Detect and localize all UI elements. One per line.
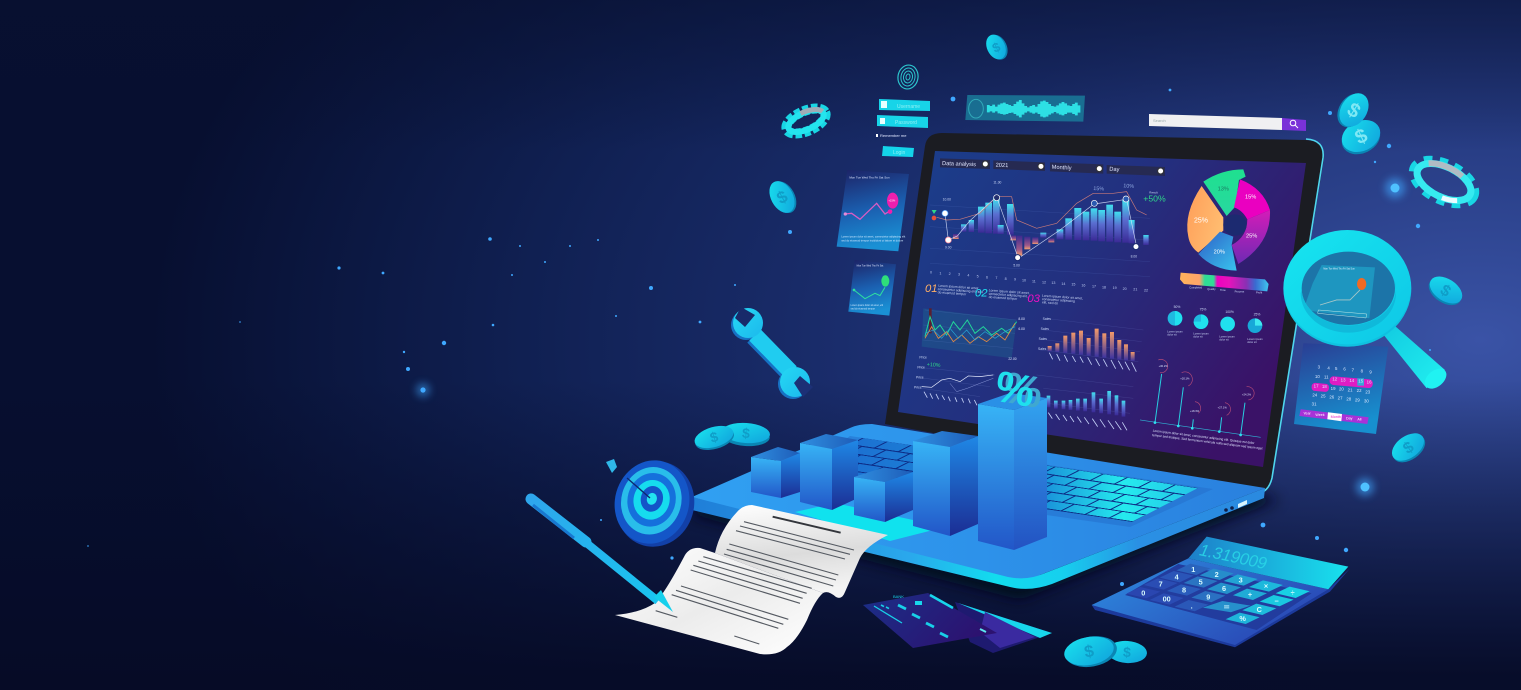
main combo chart: 11.00 — [993, 180, 1002, 184]
calendar: 13 — [1341, 377, 1346, 382]
wave area chart — [922, 308, 1025, 361]
mini chart card 2: Mon Tue Wed Thu Fri Sat — [857, 265, 884, 268]
numbered notes: 01 — [925, 283, 938, 295]
legend strip: Quality — [1207, 287, 1216, 291]
donut pie chart — [1187, 169, 1270, 271]
calendar: All — [1357, 418, 1362, 422]
orange bar chart: Sales — [1043, 317, 1051, 321]
coin: right: $ — [1437, 282, 1454, 301]
calendar: 31 — [1312, 402, 1317, 407]
wave area chart: 22.00 — [1008, 357, 1017, 361]
calculator keys: 9 — [1206, 592, 1210, 601]
donut pie chart: 25% — [1246, 234, 1257, 240]
coin pair: bottom: $ — [1123, 644, 1132, 660]
progress circles: dolor sit — [1219, 337, 1229, 341]
voice waveform panel — [965, 95, 1085, 122]
calculator keys: 3 — [1239, 576, 1243, 585]
calendar: 17 — [1314, 383, 1319, 388]
back card — [955, 602, 1052, 653]
3D bar 3 — [854, 468, 913, 522]
timeline: +18.3% — [1190, 409, 1200, 413]
calculator keys — [1125, 564, 1312, 630]
calculator readout: 1.319009 — [1198, 540, 1269, 573]
legend strip: Process — [1235, 289, 1245, 293]
timeline: +27.1% — [1218, 406, 1227, 410]
pie segment purple — [1232, 210, 1270, 264]
calendar: 29 — [1355, 397, 1360, 402]
orange bar chart: Sales — [1038, 347, 1047, 351]
numbered notes: 02 — [975, 288, 988, 300]
calculator keys: ÷ — [1291, 588, 1295, 597]
progress circles: dolor sit — [1193, 334, 1203, 338]
coin stack: top right: $ — [1352, 125, 1371, 149]
coin pair: on desk left: $ — [742, 425, 751, 441]
coin: lower right — [1387, 428, 1430, 468]
calculator — [1092, 537, 1350, 647]
lens chart card: Mon Tue Wed Thu Fri Sat Sun — [1323, 268, 1355, 271]
timeline: Lorem ipsum dolor sit amet, consectetur adipiscing elit. Quisque est dolor — [1153, 429, 1255, 445]
pie segment orange — [1187, 186, 1223, 253]
calendar: 25 — [1321, 393, 1326, 398]
progress circles: 75% — [1200, 307, 1206, 311]
timeline: tempor sed tristique. Sed fermentum vehicula nulla sed aliquam sed ipsum eget — [1152, 433, 1263, 451]
line chart: Price — [916, 376, 924, 380]
floating gear right — [1408, 153, 1480, 211]
main combo chart: 15% — [1093, 186, 1104, 193]
hour axis: 22 — [1144, 289, 1148, 293]
magnifying glass — [1283, 230, 1450, 393]
coin pair: bottom: $ — [1083, 641, 1096, 662]
hour axis: 2 — [949, 272, 951, 276]
timeline: +30.2% — [1159, 364, 1168, 368]
laptop lid — [885, 133, 1324, 494]
calendar: 18 — [1322, 384, 1327, 389]
calendar: 6 — [1343, 367, 1346, 372]
fingerprint icon — [896, 63, 920, 91]
numbered notes: elit, sed do — [1042, 300, 1058, 305]
hour axis: 16 — [1081, 284, 1085, 288]
donut pie chart: 15% — [1245, 195, 1256, 201]
timeline: +20.1% — [1180, 377, 1190, 381]
calendar: Day — [1346, 416, 1353, 420]
ports — [1224, 500, 1247, 512]
calendar: 5 — [1335, 366, 1338, 371]
numbered notes: Lorem ipsum dolor sit amet, — [989, 288, 1030, 295]
calculator keys: % — [1239, 614, 1246, 623]
calculator keys: − — [1275, 596, 1279, 605]
calendar: Week — [1315, 413, 1325, 417]
paper receipt — [615, 505, 888, 654]
search bar — [1149, 114, 1306, 131]
coin: right — [1424, 271, 1467, 311]
hour axis: 3 — [958, 273, 960, 277]
calculator keys: 6 — [1222, 584, 1226, 593]
legend strip: Time — [1220, 288, 1226, 292]
numbered notes: consectetur adipiscing elit, sed — [938, 287, 983, 294]
hour axis: 13 — [1051, 281, 1055, 285]
wave area chart: 8.00 — [1018, 317, 1025, 321]
front card — [863, 593, 997, 648]
calendar: 19 — [1331, 386, 1336, 391]
3D bar 2 — [800, 434, 858, 510]
calendar: 20 — [1339, 387, 1344, 392]
lens — [1301, 251, 1396, 326]
calendar — [1294, 343, 1388, 434]
numbered notes: Lorem ipsum dolor sit amet, — [938, 284, 980, 291]
main combo chart: 9.00 — [945, 245, 952, 249]
calendar: 12 — [1332, 377, 1338, 382]
numbered notes: 03 — [1027, 293, 1041, 305]
hour axis: 18 — [1102, 285, 1106, 289]
orange bar chart: Sales — [1039, 337, 1047, 341]
hour axis: 21 — [1133, 288, 1137, 292]
calendar: 14 — [1349, 378, 1355, 383]
mini chart card 2 — [848, 260, 896, 316]
3D percent sign: % — [999, 363, 1046, 418]
timeline — [1140, 359, 1263, 451]
progress circles: Lorem ipsum — [1167, 329, 1183, 333]
progress circles: 50% — [1174, 305, 1180, 309]
calendar: 24 — [1312, 393, 1318, 398]
calculator keys: 00 — [1163, 595, 1171, 604]
coin: left — [764, 176, 801, 218]
coin pair: on desk left: $ — [708, 428, 720, 446]
dashboard content — [914, 158, 1270, 451]
orange bar chart — [1038, 317, 1143, 372]
numbered notes: do eiusmod tempor — [989, 295, 1018, 301]
base top surface — [692, 424, 1265, 578]
calendar: Year — [1303, 412, 1311, 416]
legend strip — [1180, 273, 1269, 294]
pie segment green — [1203, 169, 1246, 216]
hour axis — [930, 270, 1148, 293]
dashboard screen — [898, 151, 1306, 467]
donut pie chart: 20% — [1214, 250, 1225, 256]
progress circles: 100% — [1225, 310, 1234, 314]
login form — [876, 99, 930, 157]
hour axis: 19 — [1113, 286, 1117, 290]
line chart — [914, 355, 995, 405]
pen — [531, 499, 673, 612]
hour axis: 7 — [995, 276, 997, 280]
remember me: Remember me — [880, 133, 907, 138]
hour axis: 11 — [1032, 279, 1036, 283]
calculator keys: 7 — [1159, 580, 1163, 589]
hour axis: 14 — [1061, 282, 1065, 286]
calendar: 16 — [1367, 379, 1372, 384]
3D bar 5 tall — [978, 393, 1047, 550]
receipt back fold — [715, 505, 888, 598]
numbered notes: Lorem ipsum dolor sit amet, — [1042, 294, 1083, 301]
mini chart card 2: sed do eiusmod tempor — [851, 307, 875, 310]
calendar: 9 — [1369, 369, 1372, 374]
hour axis: 5 — [977, 274, 979, 278]
calendar: 23 — [1365, 389, 1371, 394]
line chart: Price — [919, 355, 927, 359]
coins: top: $ — [990, 39, 1003, 56]
small bar chart — [1037, 375, 1133, 430]
lens chart card — [1303, 265, 1375, 318]
donut pie chart: 13% — [1218, 186, 1229, 192]
calculator keys: × — [1264, 582, 1268, 591]
filter dropdowns — [940, 158, 1165, 176]
cyan glow patch — [795, 503, 945, 541]
coin stack: top right — [1331, 87, 1386, 160]
receipt text lines — [656, 517, 854, 644]
main combo chart — [930, 180, 1166, 277]
calculator keys: = — [1224, 603, 1230, 611]
numbered notes: consectetur adipiscing — [1042, 297, 1075, 303]
hour axis: 1 — [939, 271, 941, 275]
legend strip: Profit — [1256, 290, 1262, 294]
calculator keys: + — [1248, 590, 1252, 599]
hour axis: 10 — [1022, 279, 1026, 283]
mini chart card 1: Mon Tue Wed Thu Fri Sat Sun — [849, 176, 890, 180]
main combo chart: 10.00 — [943, 198, 951, 202]
legend strip: Completed — [1189, 285, 1203, 289]
coin pair: on desk left — [692, 421, 771, 454]
receipt front fold — [615, 548, 823, 654]
3D bar 4 — [913, 431, 978, 536]
scattered glow particles — [87, 89, 1431, 586]
calendar: 27 — [1338, 395, 1343, 400]
hour axis: 9 — [1014, 278, 1016, 282]
filter dropdowns: Monthly — [1052, 165, 1072, 172]
handle — [1378, 322, 1450, 393]
laptop shadow — [690, 488, 1280, 600]
coin pair: bottom — [1062, 632, 1148, 671]
hour axis: 8 — [1005, 277, 1007, 281]
calendar: 22 — [1357, 388, 1362, 393]
mini chart card 1: +15% — [888, 198, 896, 202]
calendar: 21 — [1348, 387, 1353, 392]
front card: BANK — [893, 594, 904, 599]
main combo chart: Result — [1149, 190, 1158, 194]
calculator keys: . — [1191, 601, 1193, 610]
pie segment blue — [1198, 232, 1237, 271]
calendar: 3 — [1318, 365, 1321, 370]
progress circles — [1167, 305, 1263, 344]
calendar: 26 — [1329, 395, 1335, 400]
timeline: +24.2% — [1242, 393, 1252, 397]
main combo chart: +50% — [1143, 194, 1166, 204]
calendar: 4 — [1327, 365, 1330, 370]
login button: Login — [893, 150, 905, 156]
line chart: Price — [914, 386, 922, 390]
calendar: 10 — [1315, 374, 1320, 379]
laptop base — [692, 424, 1265, 589]
calendar: 8 — [1361, 369, 1364, 374]
calendar: Month — [1331, 415, 1341, 419]
numbered notes: do eiusmod tempor — [938, 290, 967, 296]
hour axis: 12 — [1042, 280, 1046, 284]
wave area chart: 6.00 — [1018, 327, 1025, 331]
progress circles: 25% — [1254, 312, 1260, 316]
hour axis: 0 — [930, 270, 932, 274]
filter dropdowns: Day — [1109, 167, 1120, 173]
hour axis: 20 — [1123, 287, 1127, 291]
calendar: 7 — [1352, 367, 1355, 372]
calendar: 15 — [1358, 379, 1364, 384]
numbered notes — [925, 283, 1083, 305]
calculator keys: 2 — [1215, 570, 1219, 579]
progress circles: Lorem ipsum — [1193, 331, 1209, 335]
base side edge — [692, 488, 1265, 589]
mini chart card 1: Lorem ipsum dolor sit amet, consectetur adipiscing elit — [841, 234, 906, 238]
calendar: 28 — [1346, 397, 1352, 402]
hour axis: 15 — [1071, 283, 1075, 287]
hour axis: 17 — [1092, 284, 1096, 288]
calculator keys: 4 — [1175, 572, 1180, 581]
search bar: Search — [1153, 118, 1166, 123]
password field: Password — [895, 120, 917, 126]
main combo chart: 8.00 — [1131, 254, 1137, 258]
3D bar 1 — [751, 447, 800, 498]
keyboard — [790, 436, 1213, 527]
3D percent sign: % — [992, 362, 1039, 417]
calendar: 30 — [1364, 399, 1369, 404]
hour axis: 4 — [967, 274, 969, 278]
ring — [1283, 230, 1411, 347]
calculator keys: C — [1257, 605, 1263, 614]
calculator keys: 5 — [1199, 578, 1203, 587]
progress circles: Lorem ipsum — [1219, 334, 1235, 338]
username field: Username — [897, 104, 920, 110]
filter dropdowns: 2021 — [996, 163, 1008, 169]
filter dropdowns: Data analysis — [942, 161, 976, 168]
pie segment magenta — [1234, 179, 1270, 219]
numbered notes: consectetur adipiscing elit, — [989, 292, 1028, 298]
wrench — [731, 307, 813, 399]
progress circles: Lorem ipsum — [1247, 337, 1263, 341]
orange bar chart: Sales — [1041, 327, 1049, 331]
calculator keys: 1 — [1191, 565, 1195, 574]
coin: left: $ — [774, 187, 791, 208]
calculator keys: 0 — [1141, 588, 1145, 597]
calculator keys: 8 — [1182, 586, 1186, 595]
coin stack: top right: $ — [1343, 99, 1364, 123]
hour axis: 6 — [986, 275, 988, 279]
progress circles: dolor sit — [1247, 340, 1257, 344]
coins: top — [982, 31, 1011, 63]
donut pie chart: 25% — [1194, 218, 1208, 225]
line chart: Price — [917, 366, 925, 370]
mini chart card 2: Lorem ipsum dolor sit amet, elit — [851, 304, 883, 307]
line chart: +10% — [927, 362, 941, 369]
floating gear left — [783, 103, 829, 139]
credit cards — [863, 593, 1052, 653]
progress circles: dolor sit — [1167, 332, 1177, 336]
calendar: 11 — [1324, 375, 1329, 380]
mini chart card 1 — [837, 170, 909, 251]
mini chart card 1: sed do eiusmod tempor incididunt ut labore et dolore — [841, 238, 904, 242]
target with arrow — [605, 451, 704, 556]
main combo chart: 10% — [1123, 183, 1134, 190]
coin: lower right: $ — [1400, 439, 1417, 458]
main combo chart: 5.00 — [1013, 264, 1020, 268]
